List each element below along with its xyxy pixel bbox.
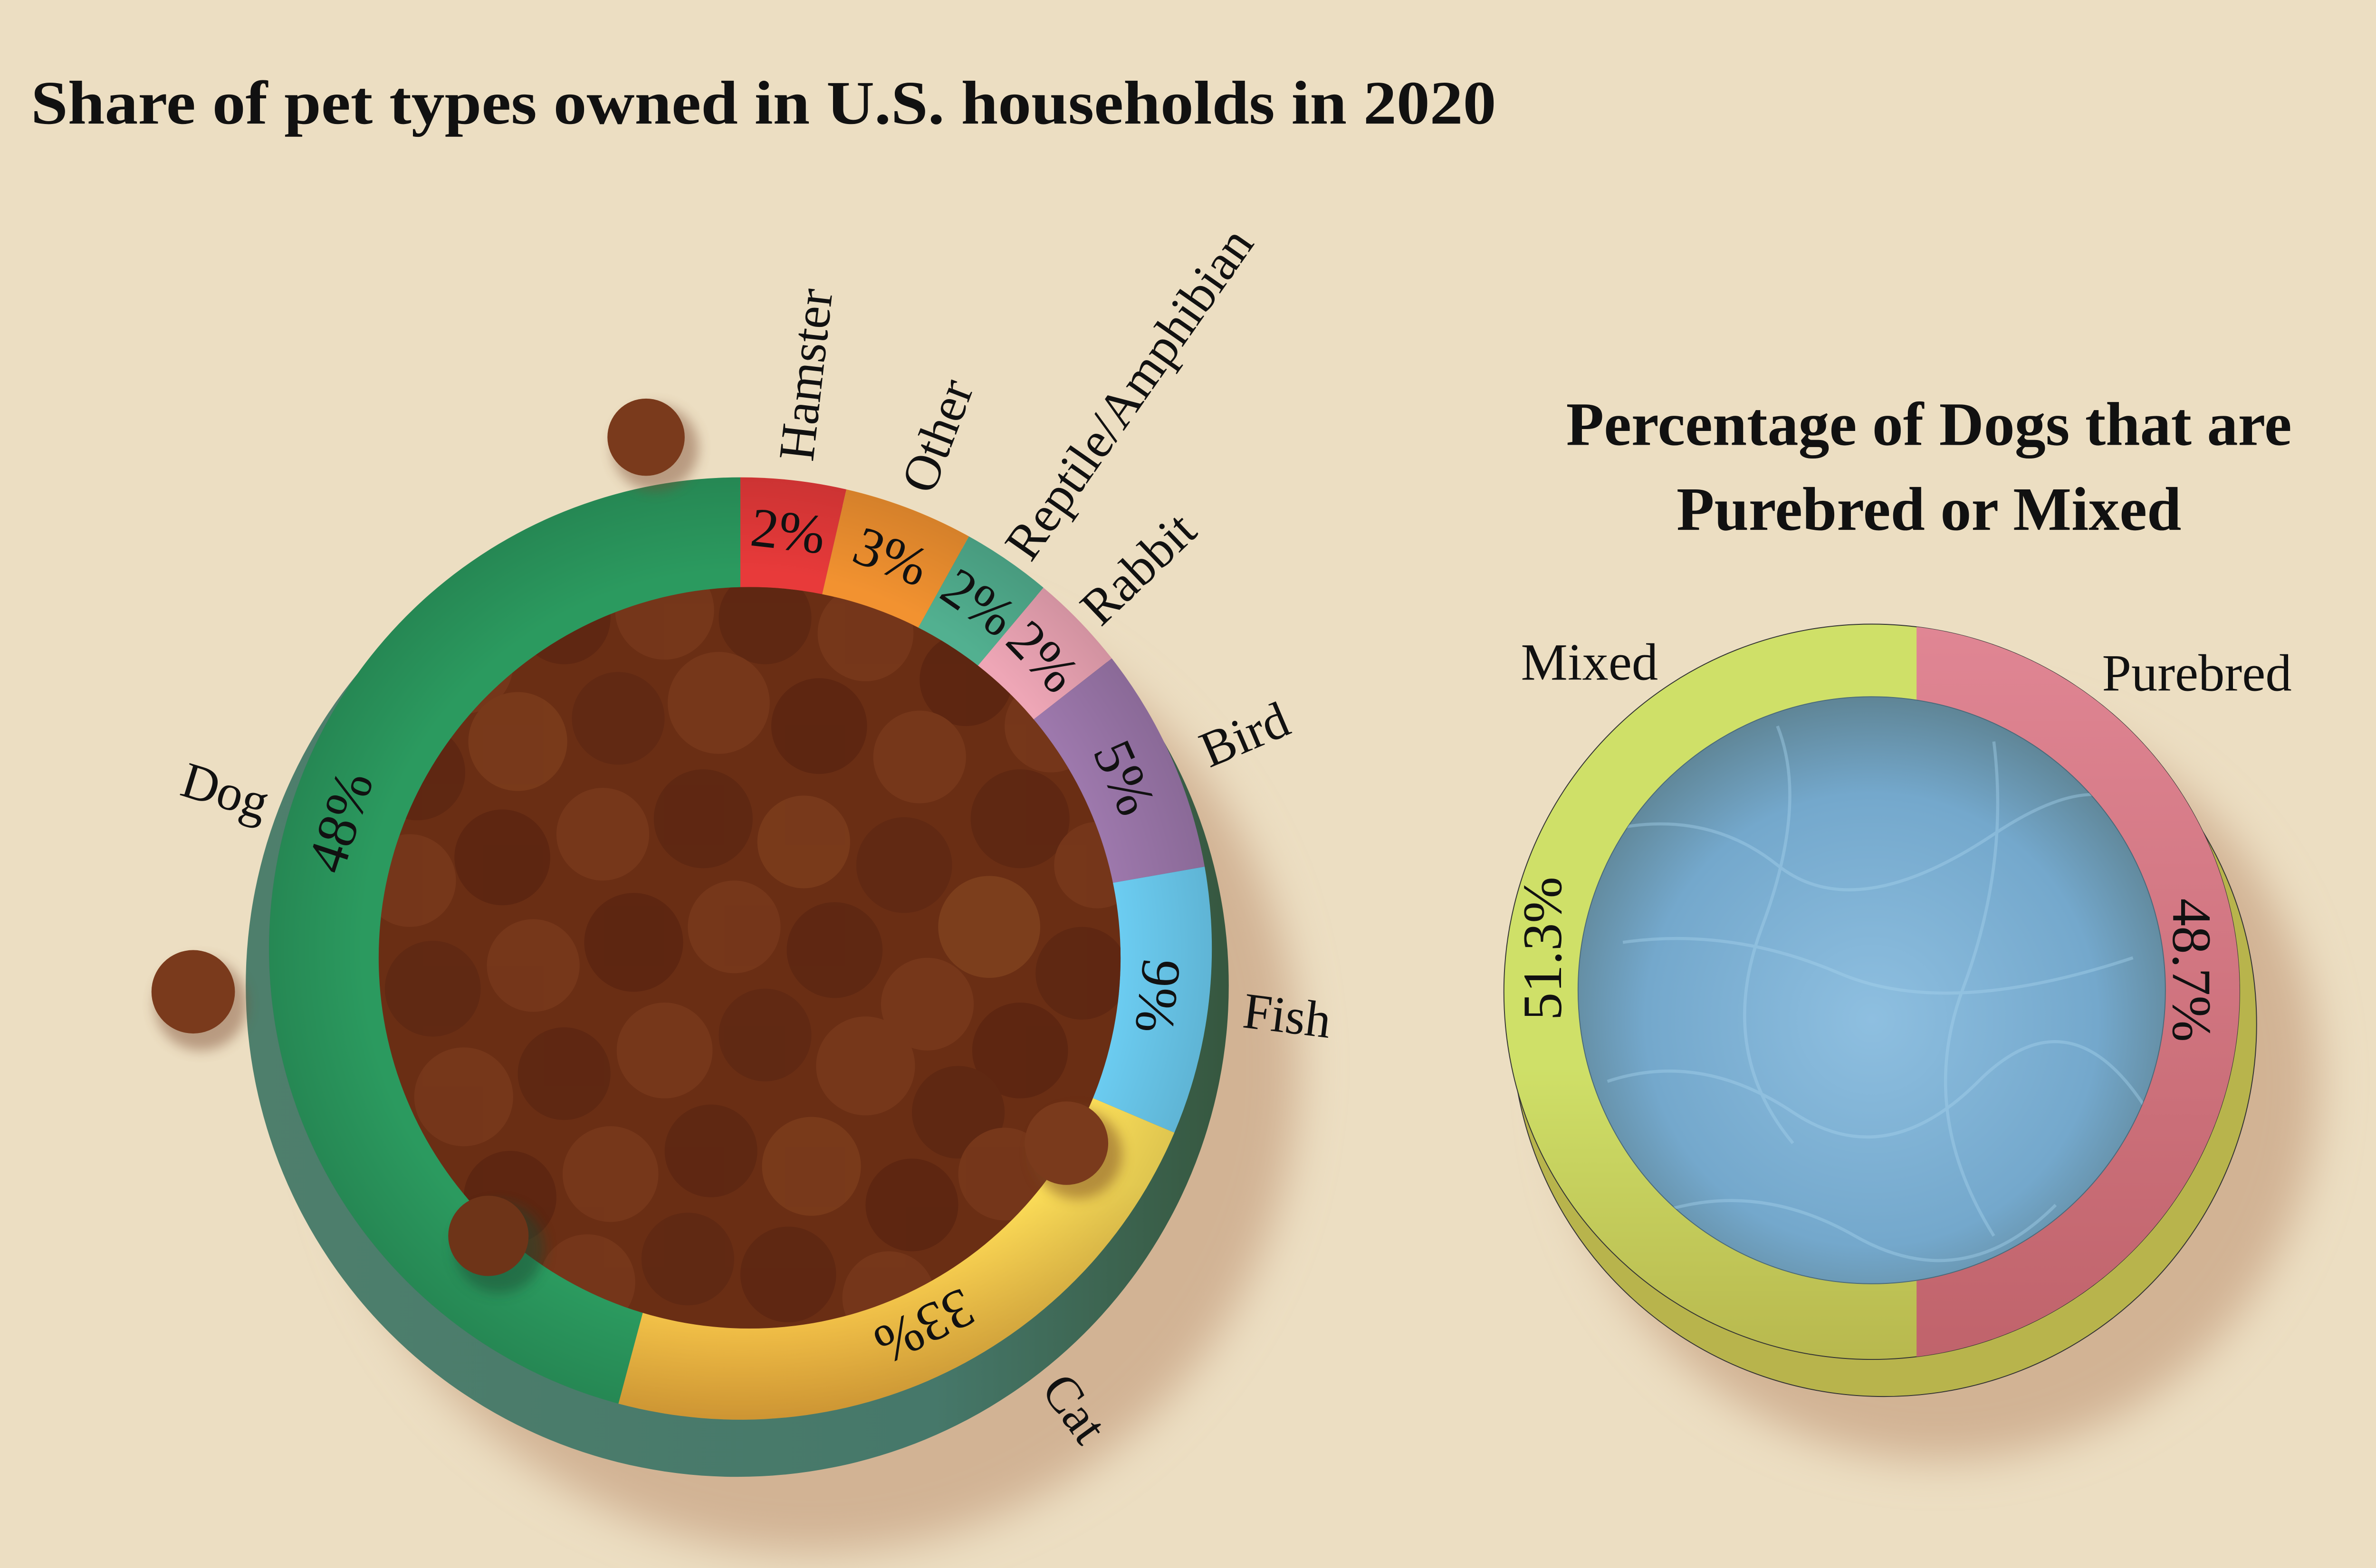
water bbox=[1578, 697, 2165, 1284]
chart: purebred vs mixed bowl: 48.7% bbox=[2161, 899, 2222, 1042]
ring: purebred bbox=[1916, 627, 2240, 1357]
labels: Purebred bbox=[2102, 643, 2292, 702]
subtitle: dogs purebred or mixed bbox=[1566, 390, 2292, 544]
kibble pieces bbox=[152, 399, 1122, 1293]
percentage labels: 5% bbox=[1081, 731, 1167, 824]
percentage labels: 2% bbox=[995, 609, 1091, 705]
category labels: Other bbox=[890, 372, 985, 500]
bowl base bbox=[1512, 652, 2257, 1396]
percentage labels: 3% bbox=[845, 515, 937, 598]
segment: bird bbox=[740, 659, 1205, 948]
ring: mixed bbox=[1504, 624, 2240, 1359]
category labels bbox=[175, 218, 1334, 1454]
ring segments bbox=[269, 478, 1212, 1420]
labels: Mixed bbox=[1521, 633, 1658, 691]
category labels: Dog bbox=[175, 751, 276, 831]
shadow bbox=[325, 579, 1298, 1552]
category labels: Fish bbox=[1240, 982, 1334, 1049]
category labels: Cat bbox=[1031, 1363, 1118, 1454]
segment: cat bbox=[618, 948, 1174, 1420]
segment: hamster bbox=[740, 478, 846, 948]
category labels: Reptile/Amphibian bbox=[994, 218, 1265, 570]
chart: pet type share bowl bbox=[152, 218, 1334, 1552]
segment: reptile bbox=[740, 536, 1044, 948]
subtitle: dogs purebred or mixed: Percentage of Dogs that are bbox=[1566, 390, 2292, 459]
percentage labels: 2% bbox=[930, 556, 1026, 649]
shadow bbox=[1561, 703, 2319, 1460]
category labels: Bird bbox=[1192, 691, 1297, 778]
percentage labels: 2% bbox=[747, 497, 828, 566]
percentage labels bbox=[296, 497, 1193, 1376]
percentage labels: 33% bbox=[865, 1276, 984, 1376]
segment: other bbox=[740, 489, 969, 948]
chart: purebred vs mixed bowl: 51.3% bbox=[1512, 877, 1573, 1020]
chart: purebred vs mixed bowl bbox=[1504, 624, 2319, 1460]
labels bbox=[1521, 633, 2292, 702]
subtitle: dogs purebred or mixed: Purebred or Mixed bbox=[1677, 475, 2181, 544]
bowl base bbox=[246, 494, 1229, 1477]
segment: fish bbox=[740, 867, 1212, 1133]
percentage labels: 9% bbox=[1123, 956, 1193, 1036]
segment: dog bbox=[269, 478, 740, 1404]
percentage labels: 48% bbox=[296, 764, 385, 880]
category labels: Hamster bbox=[768, 286, 844, 464]
segment: rabbit bbox=[740, 588, 1112, 948]
category labels: Rabbit bbox=[1070, 501, 1207, 636]
title: Share of pet types owned in U.S. households in 2020 bbox=[31, 69, 1496, 137]
food disk bbox=[363, 561, 1140, 1344]
